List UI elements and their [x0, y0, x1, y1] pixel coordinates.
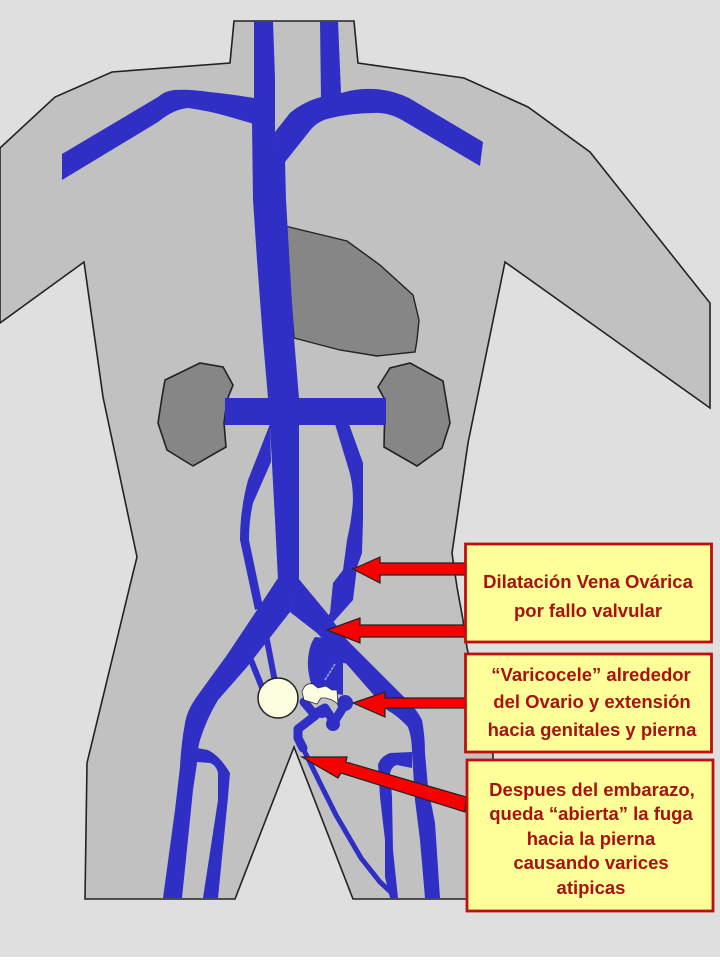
pelvic feeders to ovary: [251, 635, 275, 690]
arrow 1: [353, 557, 466, 583]
ovary left: [258, 678, 298, 718]
left leg branch: [197, 748, 230, 898]
callout: despues del embarazo: [467, 760, 713, 911]
left iliac vein: [163, 578, 298, 898]
callout: despues del embarazo: atipicas: [557, 877, 625, 898]
right leg branch: [378, 752, 412, 898]
arrow 2: [327, 618, 466, 643]
callout: vena ovarica: por fallo valvular: [514, 600, 662, 621]
renal veins: [225, 398, 386, 425]
callout: despues del embarazo: queda “abierta” la fuga: [489, 803, 693, 824]
right subclavian branch: [275, 89, 483, 166]
callout: vena ovarica: Dilatación Vena Ovárica: [483, 571, 694, 592]
callout: vena ovarica: [466, 544, 712, 642]
left subclavian branch: [62, 90, 254, 180]
left ovarian vein: [240, 424, 271, 610]
callout: despues del embarazo: Despues del embarazo,: [489, 779, 695, 800]
arrow 3: [353, 692, 466, 717]
varicose network: [298, 702, 344, 748]
venous system: [62, 21, 483, 898]
right ovarian vein: [318, 424, 363, 630]
callout: varicocele: del Ovario y extensión: [493, 691, 691, 712]
ovary right: [302, 684, 338, 704]
varicocele mass: [308, 637, 372, 695]
callout: despues del embarazo: hacia la pierna: [527, 828, 656, 849]
left kidney: [158, 363, 233, 466]
right iliac vein: [290, 578, 440, 898]
right neck vein: [320, 21, 341, 100]
vena cava and left neck vein: [252, 21, 299, 580]
callout: varicocele: hacia genitales y pierna: [488, 719, 697, 740]
arrow 4: [302, 757, 466, 812]
right kidney: [378, 363, 450, 466]
callout: varicocele: [466, 654, 712, 752]
liver: [285, 226, 419, 356]
callout: despues del embarazo: causando varices: [513, 852, 669, 873]
leg leak vein: [298, 738, 395, 896]
vein highlight: [325, 664, 335, 680]
callout: varicocele: “Varicocele” alrededor: [491, 664, 691, 685]
